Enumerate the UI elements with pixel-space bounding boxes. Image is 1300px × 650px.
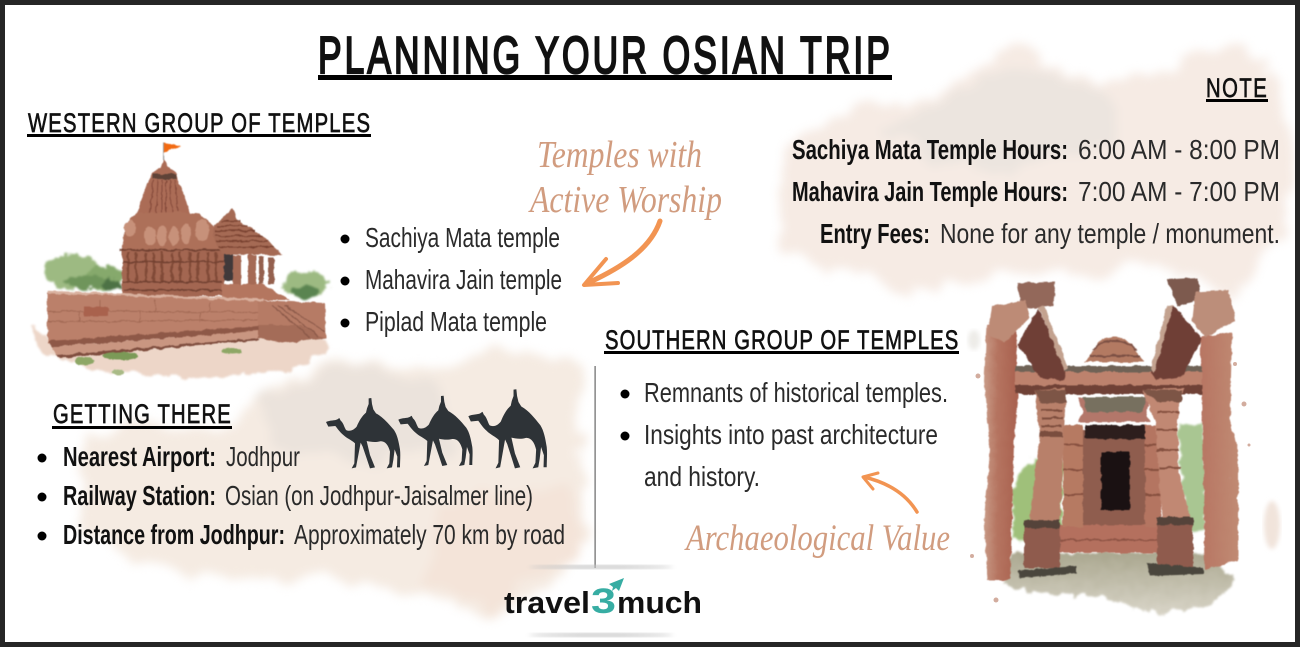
text block: hours and fees [792,134,1280,249]
doorway [1101,452,1130,510]
logo: travel3much: much [617,585,702,620]
annotation: temples with active worship: Temples with [537,134,702,176]
icon: camel caravan [326,389,547,468]
back wall and base [1083,430,1157,527]
list: temples with active worship: Piplad Mata temple [365,306,547,337]
list: temples with active worship: Mahavira Jain temple [365,264,562,295]
front left pillar [1030,388,1066,520]
arrow: worship to list [584,221,660,285]
trees [1012,422,1206,540]
list: getting there: Osian (on Jodhpur-Jaisalmer line) [225,480,533,511]
mandapa dome [212,208,283,255]
front right pillar [1142,388,1190,517]
shikhara tower [137,160,190,213]
list: getting there: Railway Station: [63,480,216,511]
list: getting there: Approximately 70 km by road [294,519,565,550]
logo: travel3much: travel [504,585,590,620]
lintel [1015,367,1202,393]
canopy [1078,397,1150,422]
logo: travel3much: 3 [591,582,616,621]
grass [102,352,138,360]
heading: getting there: GETTING THERE [53,399,231,430]
list: southern group [620,377,948,492]
watercolor wash: right edge [1264,501,1280,549]
list: getting there: Distance from Jodhpur: [63,519,285,550]
arrow: archaeological value [863,473,917,512]
temple body [122,250,224,296]
text block: hours and fees: Mahavira Jain Temple Hours: [792,176,1068,207]
list: getting there: Nearest Airport: [63,441,216,472]
bushes [44,254,329,298]
list: temples with active worship: Sachiya Mata temple [365,222,560,253]
watercolor wash: getting there background [80,348,587,608]
heading: western group of temples: WESTERN GROUP OF TEMPLES [28,108,370,139]
heading: note: NOTE [1206,73,1267,104]
logo: travel3much [504,565,702,637]
pavilion columns [224,254,233,280]
flag [163,143,164,163]
list: southern group: Insights into past architecture [644,419,938,450]
annotation: archaeological value: Archaeological Value [684,518,950,559]
title: PLANNING YOUR OSIAN TRIP [318,27,890,85]
annotation: temples with active worship [527,134,722,221]
illustration: southern ruined temple [968,278,1250,614]
divider line [594,366,596,568]
far left pillar [984,318,1018,580]
text block: hours and fees: Sachiya Mata Temple Hours: [792,134,1068,165]
list: getting there: Jodhpur [226,441,300,472]
wall [47,292,263,343]
list: temples with active worship [340,222,562,337]
text block: hours and fees: Entry Fees: [820,218,930,249]
list: southern group: and history. [644,461,760,492]
slanted beams [1017,308,1066,381]
ground [1002,553,1235,614]
far right pillar [1200,332,1238,570]
heading: southern group of temples: SOUTHERN GROUP OF TEMPLES [605,325,958,356]
watercolor wash: note background [785,42,1285,288]
arched pediment [1084,337,1144,362]
list: getting there [38,441,565,550]
annotation: temples with active worship: Active Worship [527,179,722,221]
illustration: western temple [30,143,329,378]
paint splatter [968,330,1250,602]
ground wash [30,325,328,378]
list: southern group: Remnants of historical temples. [644,377,948,408]
